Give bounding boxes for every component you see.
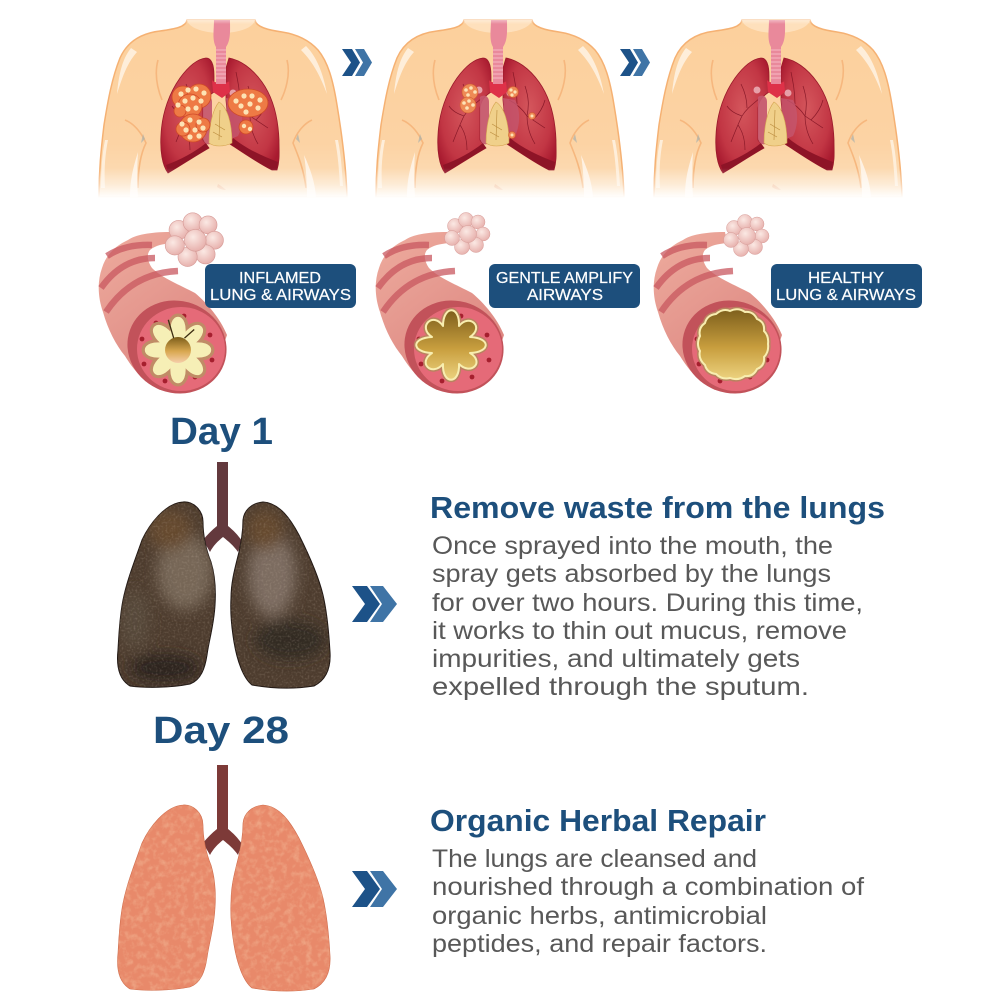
lungs illustration: [438, 20, 556, 173]
label: inflamed: INFLAMED: [239, 270, 321, 287]
partly open lumen: [416, 310, 486, 380]
label: inflamed: [205, 264, 356, 308]
arrow: first to second chest: [342, 49, 372, 76]
big arrow: day 28: [352, 871, 397, 907]
heading: day 28: Day 28: [153, 710, 289, 752]
top fade on chests: [90, 14, 910, 24]
narrowed lumen: [146, 318, 210, 382]
panel: healthy airway: [654, 214, 795, 407]
label: healthy: [771, 264, 922, 308]
text: organic repair body: The lungs are cleansed and: [432, 845, 757, 873]
label: healthy: LUNG & AIRWAYS: [776, 287, 916, 304]
dark lungs: [118, 462, 330, 688]
tumours: [172, 84, 268, 142]
alveoli cluster: [724, 214, 769, 256]
label: inflamed: LUNG & AIRWAYS: [210, 287, 351, 304]
torso illustration: [654, 20, 902, 197]
text: remove waste body: expelled through the sputum.: [432, 673, 809, 701]
airway illustration: [99, 232, 240, 407]
panel: inflamed chest: [99, 20, 347, 197]
text: organic repair body: [432, 845, 864, 958]
text: remove waste body: impurities, and ultimately gets: [432, 645, 800, 673]
text: remove waste body: spray gets absorbed by the lungs: [432, 560, 831, 588]
heading: organic repair: Organic Herbal Repair: [430, 803, 766, 838]
lungs illustration: [716, 20, 834, 173]
text: organic repair body: organic herbs, antimicrobial: [432, 902, 767, 930]
bottom fade on chests: [90, 168, 910, 198]
panel: amplified airway: [376, 212, 517, 407]
arrow: second to third chest: [620, 49, 650, 76]
alveoli cluster: [165, 213, 223, 267]
speckle texture: [118, 502, 330, 688]
alveoli cluster: [444, 212, 490, 254]
text: remove waste body: Once sprayed into the mouth, the: [432, 532, 833, 560]
airway illustration: [376, 232, 517, 407]
open lumen: [698, 309, 768, 379]
airway illustration: [654, 232, 795, 407]
trachea: [203, 765, 242, 855]
torso illustration: [99, 20, 347, 197]
text: remove waste body: for over two hours. During this time,: [432, 589, 863, 617]
lighter patches: [121, 510, 326, 682]
trachea: [203, 462, 242, 552]
panel: healthy chest: [654, 20, 902, 197]
label: healthy: HEALTHY: [808, 270, 884, 287]
text: organic repair body: peptides, and repair factors.: [432, 930, 767, 958]
label: gentle amplify: [489, 264, 640, 308]
text: organic repair body: nourished through a combination of: [432, 873, 864, 901]
tissue texture: [118, 805, 330, 991]
panel: inflamed airway: [99, 213, 240, 407]
text: remove waste body: [432, 532, 863, 701]
healthy lungs: [118, 765, 330, 991]
text: remove waste body: it works to thin out mucus, remove: [432, 617, 847, 645]
label: gentle amplify: GENTLE AMPLIFY: [496, 270, 633, 287]
heading: remove waste: Remove waste from the lungs: [430, 490, 885, 525]
heading: day 1: Day 1: [170, 411, 273, 453]
label: gentle amplify: AIRWAYS: [527, 287, 603, 304]
big arrow: day 1: [352, 586, 397, 622]
panel: improving chest: [376, 20, 624, 197]
lungs illustration: [161, 20, 279, 173]
torso illustration: [376, 20, 624, 197]
small tumours: [460, 84, 536, 138]
